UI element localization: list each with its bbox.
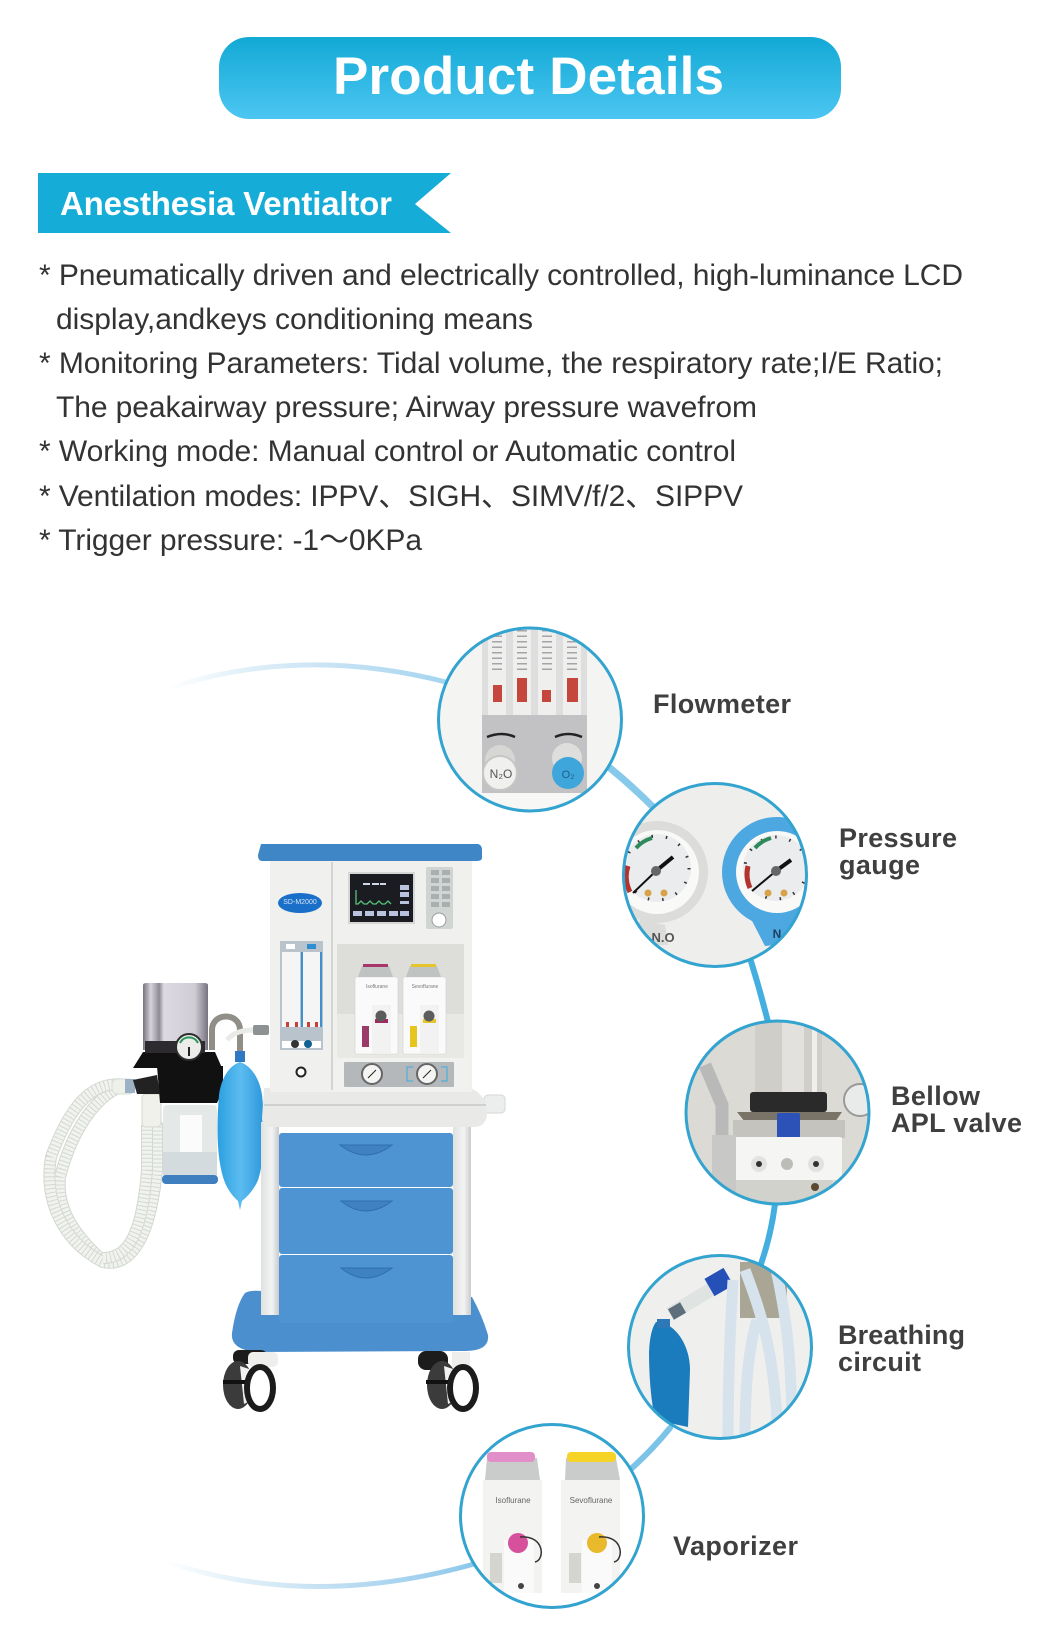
- text block: specifications: * Monitoring Parameters: Tidal volume, the respiratory rate;I/E Ratio;: [39, 347, 943, 380]
- detail circle: vaporizer: Isoflurane: [495, 1496, 531, 1505]
- detail circle: flowmeter: [438, 628, 622, 813]
- detail circle: vaporizer: Sevoflurane: [570, 1496, 613, 1505]
- text block: specifications: [39, 259, 963, 557]
- title: Product Details: [219, 37, 841, 119]
- detail circle: bellow APL valve: [686, 1021, 876, 1206]
- heading: Anesthesia Ventialtor ribbon: Anesthesia Ventialtor: [60, 185, 392, 222]
- work table: [262, 1088, 505, 1127]
- detail circle: pressure gauge: N: [773, 927, 781, 941]
- title: Product Details: Product Details: [333, 47, 724, 106]
- gooseneck pipe: [212, 1016, 240, 1052]
- label: Bellow APL valve: APL valve: [891, 1108, 1022, 1138]
- base: [232, 1291, 488, 1352]
- label: Bellow APL valve: Bellow: [891, 1081, 981, 1111]
- label: Vaporizer: Vaporizer: [673, 1531, 798, 1561]
- label: Breathing circuit: [838, 1320, 965, 1377]
- label: Pressure gauge: Pressure: [839, 823, 957, 853]
- vaporizer bay: [337, 944, 464, 1058]
- vaporizers: [355, 964, 446, 1054]
- heading: Anesthesia Ventialtor ribbon: [38, 173, 451, 233]
- label: Pressure gauge: gauge: [839, 850, 920, 880]
- breathing hose: [49, 1079, 161, 1263]
- logo badge: [278, 893, 322, 913]
- text block: specifications: * Trigger pressure: -1〜0KPa: [39, 524, 422, 557]
- flowmeter panel: [280, 941, 323, 1050]
- label: Bellow APL valve: [891, 1081, 1022, 1138]
- top cover: [258, 844, 482, 861]
- wheels: [223, 1350, 476, 1409]
- cart columns: [261, 1122, 279, 1315]
- gas connector: [227, 1025, 269, 1040]
- label: Flowmeter: Flowmeter: [653, 689, 791, 719]
- detail circle: vaporizer: [460, 1424, 645, 1608]
- detail circle: pressure gauge: N.O: [651, 930, 675, 945]
- illustration: anesthesia machine: [49, 844, 505, 1409]
- label: Pressure gauge: [839, 823, 957, 880]
- machine body: [258, 844, 482, 1092]
- reservoir bag: [217, 1051, 264, 1210]
- control keypad: [426, 867, 453, 929]
- text block: specifications: display,andkeys conditioning means: [56, 303, 533, 336]
- LCD monitor: [348, 872, 415, 924]
- detail circle: flowmeter: N₂O: [490, 767, 512, 781]
- detail circle: pressure gauge: [622, 782, 808, 968]
- oxygen flush button: [296, 1068, 306, 1076]
- label: Breathing circuit: circuit: [838, 1347, 921, 1377]
- text block: specifications: * Working mode: Manual control or Automatic control: [39, 435, 736, 468]
- text block: specifications: * Pneumatically driven and electrically controlled, high-luminance LCD: [39, 259, 963, 292]
- detail circle: breathing circuit: [628, 1255, 812, 1440]
- bellows canister: [133, 983, 223, 1184]
- text block: specifications: * Ventilation modes: IPPV、SIGH、SIMV/f/2、SIPPV: [39, 480, 743, 513]
- text block: specifications: The peakairway pressure; Airway pressure wavefrom: [56, 391, 757, 424]
- connecting arc: [167, 665, 775, 1587]
- drawers: [279, 1133, 453, 1323]
- pressure gauge plate: [334, 1058, 468, 1091]
- vaporizers: Sevoflurane: [412, 984, 439, 990]
- detail circle: flowmeter: O₂: [562, 769, 574, 781]
- vaporizers: Isoflurane: [366, 984, 388, 990]
- label: Breathing circuit: Breathing: [838, 1320, 965, 1350]
- logo badge: SD-M2000: [283, 899, 317, 906]
